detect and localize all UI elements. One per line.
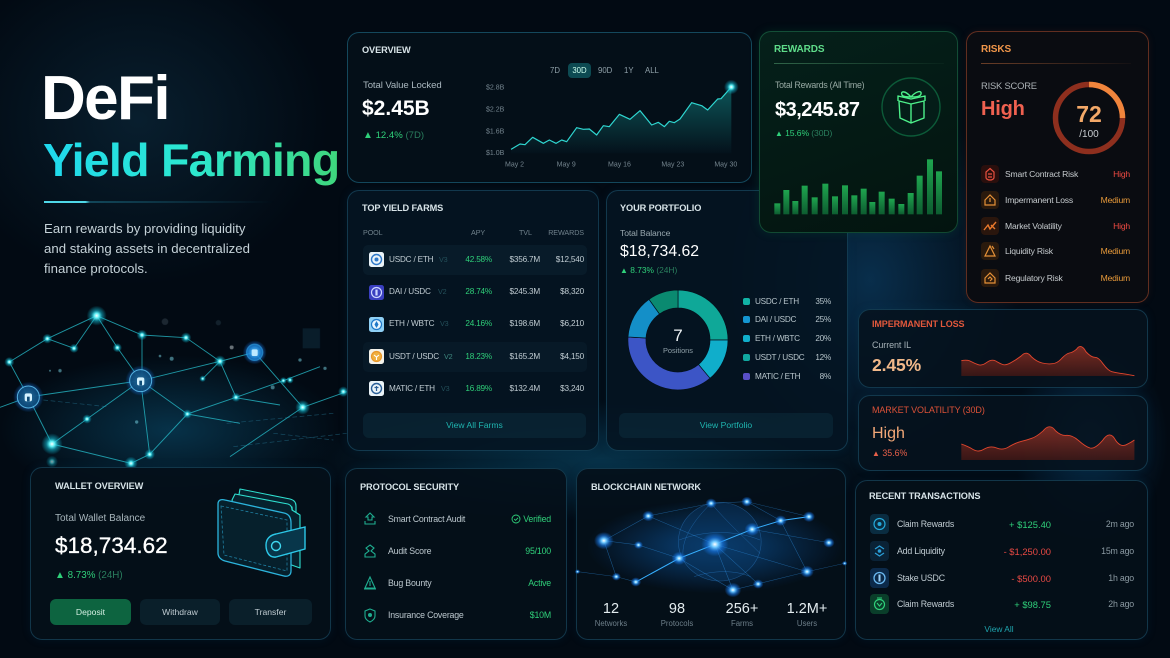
row: USDC / ETH: $12,540	[556, 255, 584, 264]
legend: MATIC / ETH	[755, 372, 800, 381]
row: claim rewards 2	[870, 594, 1134, 614]
icon: wallet	[217, 488, 306, 577]
bar chart: rewards	[774, 159, 942, 214]
row: stake usdc: Stake USDC	[897, 573, 945, 583]
row: DAI / USDC: V2	[438, 287, 446, 296]
row: claim rewards 2: Claim Rewards	[897, 599, 954, 609]
button: view portfolio: View Portfolio	[700, 420, 752, 430]
row: claim rewards 1	[870, 514, 1134, 534]
range tabs: 90D	[598, 66, 612, 75]
subtitle text: finance protocols.	[44, 261, 148, 276]
row: ETH / WBTC	[369, 317, 584, 332]
heading: DeFi: DeFi	[41, 64, 169, 133]
legend: USDT / USDC	[755, 353, 804, 362]
row: audit score	[364, 544, 551, 558]
row: bug bounty: Active	[528, 578, 551, 588]
risk: liquidity	[981, 242, 1130, 260]
row: smart contract audit: Verified	[523, 514, 551, 524]
row: USDC / ETH: $356.7M	[510, 255, 540, 264]
row: smart contract audit	[364, 512, 551, 524]
row: MATIC / ETH: MATIC / ETH	[389, 384, 435, 393]
overview heading: OVERVIEW	[362, 45, 411, 55]
button: withdraw: Withdraw	[162, 607, 198, 617]
range tabs: 30D	[572, 66, 587, 75]
button: view portfolio	[619, 413, 833, 438]
table header: APY	[471, 228, 485, 237]
blockchain heading: BLOCKCHAIN NETWORK	[591, 482, 701, 492]
row: ETH / WBTC: $6,210	[560, 319, 584, 328]
risk: regulatory: Medium	[1101, 273, 1130, 283]
button: transfer: Transfer	[255, 607, 286, 617]
portfolio heading: YOUR PORTFOLIO	[620, 203, 701, 213]
risk: smart contract: High	[1113, 169, 1130, 179]
row: insurance coverage	[364, 608, 551, 623]
network stats	[595, 601, 827, 628]
protocol heading: PROTOCOL SECURITY	[360, 482, 459, 492]
range tabs: ALL	[645, 66, 659, 75]
volatility level: High	[872, 425, 905, 442]
panel: your portfolio	[606, 190, 848, 451]
subtitle text: Earn rewards by providing liquidity	[44, 221, 246, 236]
subtitle text	[44, 34, 1102, 449]
line chart: TVL	[486, 80, 738, 169]
risk: market volatility: High	[1113, 221, 1130, 231]
panel: top yield farms	[347, 190, 599, 451]
area charts: impermanent loss and volatility	[961, 346, 1135, 460]
wallet balance amount: $18,734.62	[55, 533, 168, 558]
stat: users: Users	[797, 619, 817, 628]
range tabs	[550, 63, 659, 78]
line chart: TVL: $2.2B	[486, 106, 505, 113]
row: USDC / ETH	[363, 245, 587, 275]
button: deposit	[50, 599, 131, 625]
row: bug bounty	[364, 576, 551, 590]
stat: protocols: Protocols	[661, 619, 693, 628]
table header: TVL	[519, 228, 532, 237]
panel: overview	[347, 32, 752, 183]
stat: networks: Networks	[595, 619, 627, 628]
current il value: 2.45%	[872, 355, 921, 375]
risks heading: RISKS	[981, 44, 1011, 55]
legend: 35%	[815, 297, 831, 306]
stat: farms	[726, 601, 758, 628]
total rewards label: Total Rewards (All Time)	[775, 80, 864, 90]
row: MATIC / ETH: $3,240	[560, 384, 584, 393]
row: stake usdc: 1h ago	[1108, 573, 1134, 583]
gauge: risk score: /100	[1079, 129, 1099, 140]
table header	[363, 228, 584, 237]
row: claim rewards 1: + $125.40	[1009, 519, 1051, 530]
row: ETH / WBTC: $198.6M	[510, 319, 540, 328]
row: USDC / ETH: V3	[439, 255, 447, 264]
impermanent loss heading: IMPERMANENT LOSS	[872, 319, 964, 329]
row: add liquidity: - $1,250.00	[1004, 546, 1051, 557]
total value locked amount: $2.45B	[362, 97, 430, 120]
left network illustration	[0, 34, 1102, 467]
total rewards amount: $3,245.87	[775, 99, 859, 121]
legend: 20%	[815, 334, 831, 343]
subtitle text: and staking assets in decentralized	[44, 241, 250, 256]
range tabs: 7D	[550, 66, 560, 75]
donut chart	[628, 290, 728, 390]
row: claim rewards 1: 2m ago	[1106, 519, 1134, 529]
risk: liquidity: Medium	[1101, 246, 1130, 256]
row: DAI / USDC	[369, 285, 584, 300]
row: DAI / USDC: $245.3M	[510, 287, 540, 296]
line chart: TVL: May 9	[557, 162, 576, 169]
transactions heading: RECENT TRANSACTIONS	[869, 491, 980, 501]
row: DAI / USDC: $8,320	[560, 287, 584, 296]
row: USDC / ETH: 42.58%	[465, 255, 492, 264]
row: USDT / USDC: V2	[444, 352, 452, 361]
volatility change: ▲ 35.6%	[872, 448, 907, 458]
risk score level: High	[981, 98, 1025, 120]
row: USDC / ETH: USDC / ETH	[389, 255, 433, 264]
line chart: TVL: $2.8B	[486, 84, 505, 91]
row: USDT / USDC	[363, 342, 587, 372]
panel: blockchain network	[576, 468, 846, 640]
row: MATIC / ETH: 16.89%	[465, 384, 492, 393]
row: USDT / USDC: $4,150	[560, 352, 584, 361]
stat: networks	[595, 601, 627, 628]
risk: market volatility: Market Volatility	[1005, 221, 1062, 231]
row: stake usdc	[870, 568, 1134, 588]
total value locked label: Total Value Locked	[363, 80, 442, 91]
row: add liquidity	[870, 541, 1134, 561]
row: MATIC / ETH	[369, 381, 584, 396]
panel: recent transactions	[855, 480, 1148, 640]
risk: regulatory: Regulatory Risk	[1005, 273, 1063, 283]
row: stake usdc: - $500.00	[1011, 573, 1051, 584]
panel: wallet overview	[30, 467, 331, 640]
panel: impermanent loss	[858, 309, 1148, 388]
stat: protocols: 98	[669, 601, 685, 617]
icon: gift	[881, 77, 941, 137]
button: withdraw	[140, 599, 220, 625]
gauge: risk score: 72	[1076, 101, 1102, 127]
row: audit score: 95/100	[525, 546, 551, 556]
row: claim rewards 1: Claim Rewards	[897, 519, 954, 529]
illustration: network globe	[575, 497, 847, 597]
legend: DAI / USDC	[755, 315, 796, 324]
risk: market volatility	[981, 217, 1130, 235]
stat: users	[787, 601, 827, 628]
stat: protocols	[661, 601, 693, 628]
row: ETH / WBTC: 24.16%	[465, 319, 492, 328]
button: transfer	[229, 599, 312, 625]
row: USDT / USDC: 18.23%	[465, 352, 492, 361]
legend: 8%	[820, 372, 831, 381]
row: audit score: Audit Score	[388, 546, 431, 556]
risk: impermanent loss	[981, 191, 1130, 209]
line chart: TVL: $1.0B	[486, 150, 505, 157]
wallet change: ▲ 8.73% (24H)	[55, 570, 123, 581]
row: USDT / USDC: $165.2M	[510, 352, 540, 361]
row: smart contract audit: Smart Contract Audit	[388, 514, 465, 524]
divider line	[44, 201, 274, 203]
risk: smart contract	[981, 165, 1130, 183]
row: claim rewards 2: 2h ago	[1108, 599, 1134, 609]
row: USDT / USDC: USDT / USDC	[389, 352, 439, 361]
row: ETH / WBTC: V3	[440, 319, 448, 328]
line chart: TVL: May 16	[608, 162, 631, 169]
farms heading: TOP YIELD FARMS	[362, 203, 443, 213]
risk: smart contract: Smart Contract Risk	[1005, 169, 1078, 179]
row: bug bounty: Bug Bounty	[388, 578, 431, 588]
panel: market volatility	[858, 395, 1148, 471]
risk score label: RISK SCORE	[981, 80, 1037, 91]
title	[41, 34, 1102, 449]
volatility heading: MARKET VOLATILITY (30D)	[872, 405, 985, 415]
risk: liquidity: Liquidity Risk	[1005, 246, 1053, 256]
risk: impermanent loss: Medium	[1101, 195, 1130, 205]
row: insurance coverage: $10M	[530, 610, 551, 620]
stat: users: 1.2M+	[787, 601, 827, 617]
legend: ETH / WBTC	[755, 334, 800, 343]
wallet heading: WALLET OVERVIEW	[55, 481, 143, 491]
donut chart: 7	[673, 326, 683, 345]
gauge: risk score	[1052, 82, 1126, 154]
button: view all farms	[363, 413, 586, 438]
row: insurance coverage: Insurance Coverage	[388, 610, 464, 620]
row: add liquidity: 15m ago	[1101, 546, 1134, 556]
legend: USDC / ETH	[755, 297, 799, 306]
wallet balance label: Total Wallet Balance	[55, 513, 145, 524]
line chart: TVL: May 30	[714, 162, 737, 169]
range tabs: 1Y	[624, 66, 634, 75]
risk: impermanent loss: Impermanent Loss	[1005, 195, 1073, 205]
current il label: Current IL	[872, 340, 911, 350]
balance change: ▲ 8.73% (24H)	[620, 265, 677, 275]
row: DAI / USDC: DAI / USDC	[389, 287, 431, 296]
row: add liquidity: Add Liquidity	[897, 546, 945, 556]
row: ETH / WBTC: ETH / WBTC	[389, 319, 434, 328]
legend: 25%	[815, 315, 831, 324]
donut chart: Positions	[663, 346, 693, 355]
rewards change: ▲ 15.6% (30D)	[775, 128, 832, 138]
row: DAI / USDC: 28.74%	[465, 287, 492, 296]
panel: protocol security	[345, 468, 567, 640]
line chart: TVL: $1.6B	[486, 128, 505, 135]
change: ▲ 12.4% (7D)	[363, 130, 424, 141]
stat: farms: Farms	[731, 619, 753, 628]
link: view all: View All	[984, 624, 1014, 634]
button: deposit: Deposit	[76, 607, 105, 617]
panel: risks	[966, 31, 1149, 303]
rewards heading: REWARDS	[774, 44, 824, 55]
stat: networks: 12	[603, 601, 619, 617]
stat: farms: 256+	[726, 601, 758, 617]
row: MATIC / ETH: V3	[441, 384, 449, 393]
risk: regulatory	[981, 269, 1130, 287]
heading: Yield Farming: Yield Farming	[43, 134, 339, 186]
button: view all farms: View All Farms	[446, 420, 503, 430]
table header: REWARDS	[548, 228, 584, 237]
row: MATIC / ETH: $132.4M	[510, 384, 540, 393]
legend	[743, 297, 831, 381]
legend: 12%	[815, 353, 831, 362]
total balance label: Total Balance	[620, 228, 670, 238]
table header: POOL	[363, 228, 383, 237]
panel: rewards	[759, 31, 958, 233]
total balance amount: $18,734.62	[620, 243, 699, 260]
line chart: TVL: May 23	[661, 162, 684, 169]
risk list	[981, 165, 1130, 287]
row: claim rewards 2: + $98.75	[1014, 599, 1051, 610]
line chart: TVL: May 2	[505, 162, 524, 169]
